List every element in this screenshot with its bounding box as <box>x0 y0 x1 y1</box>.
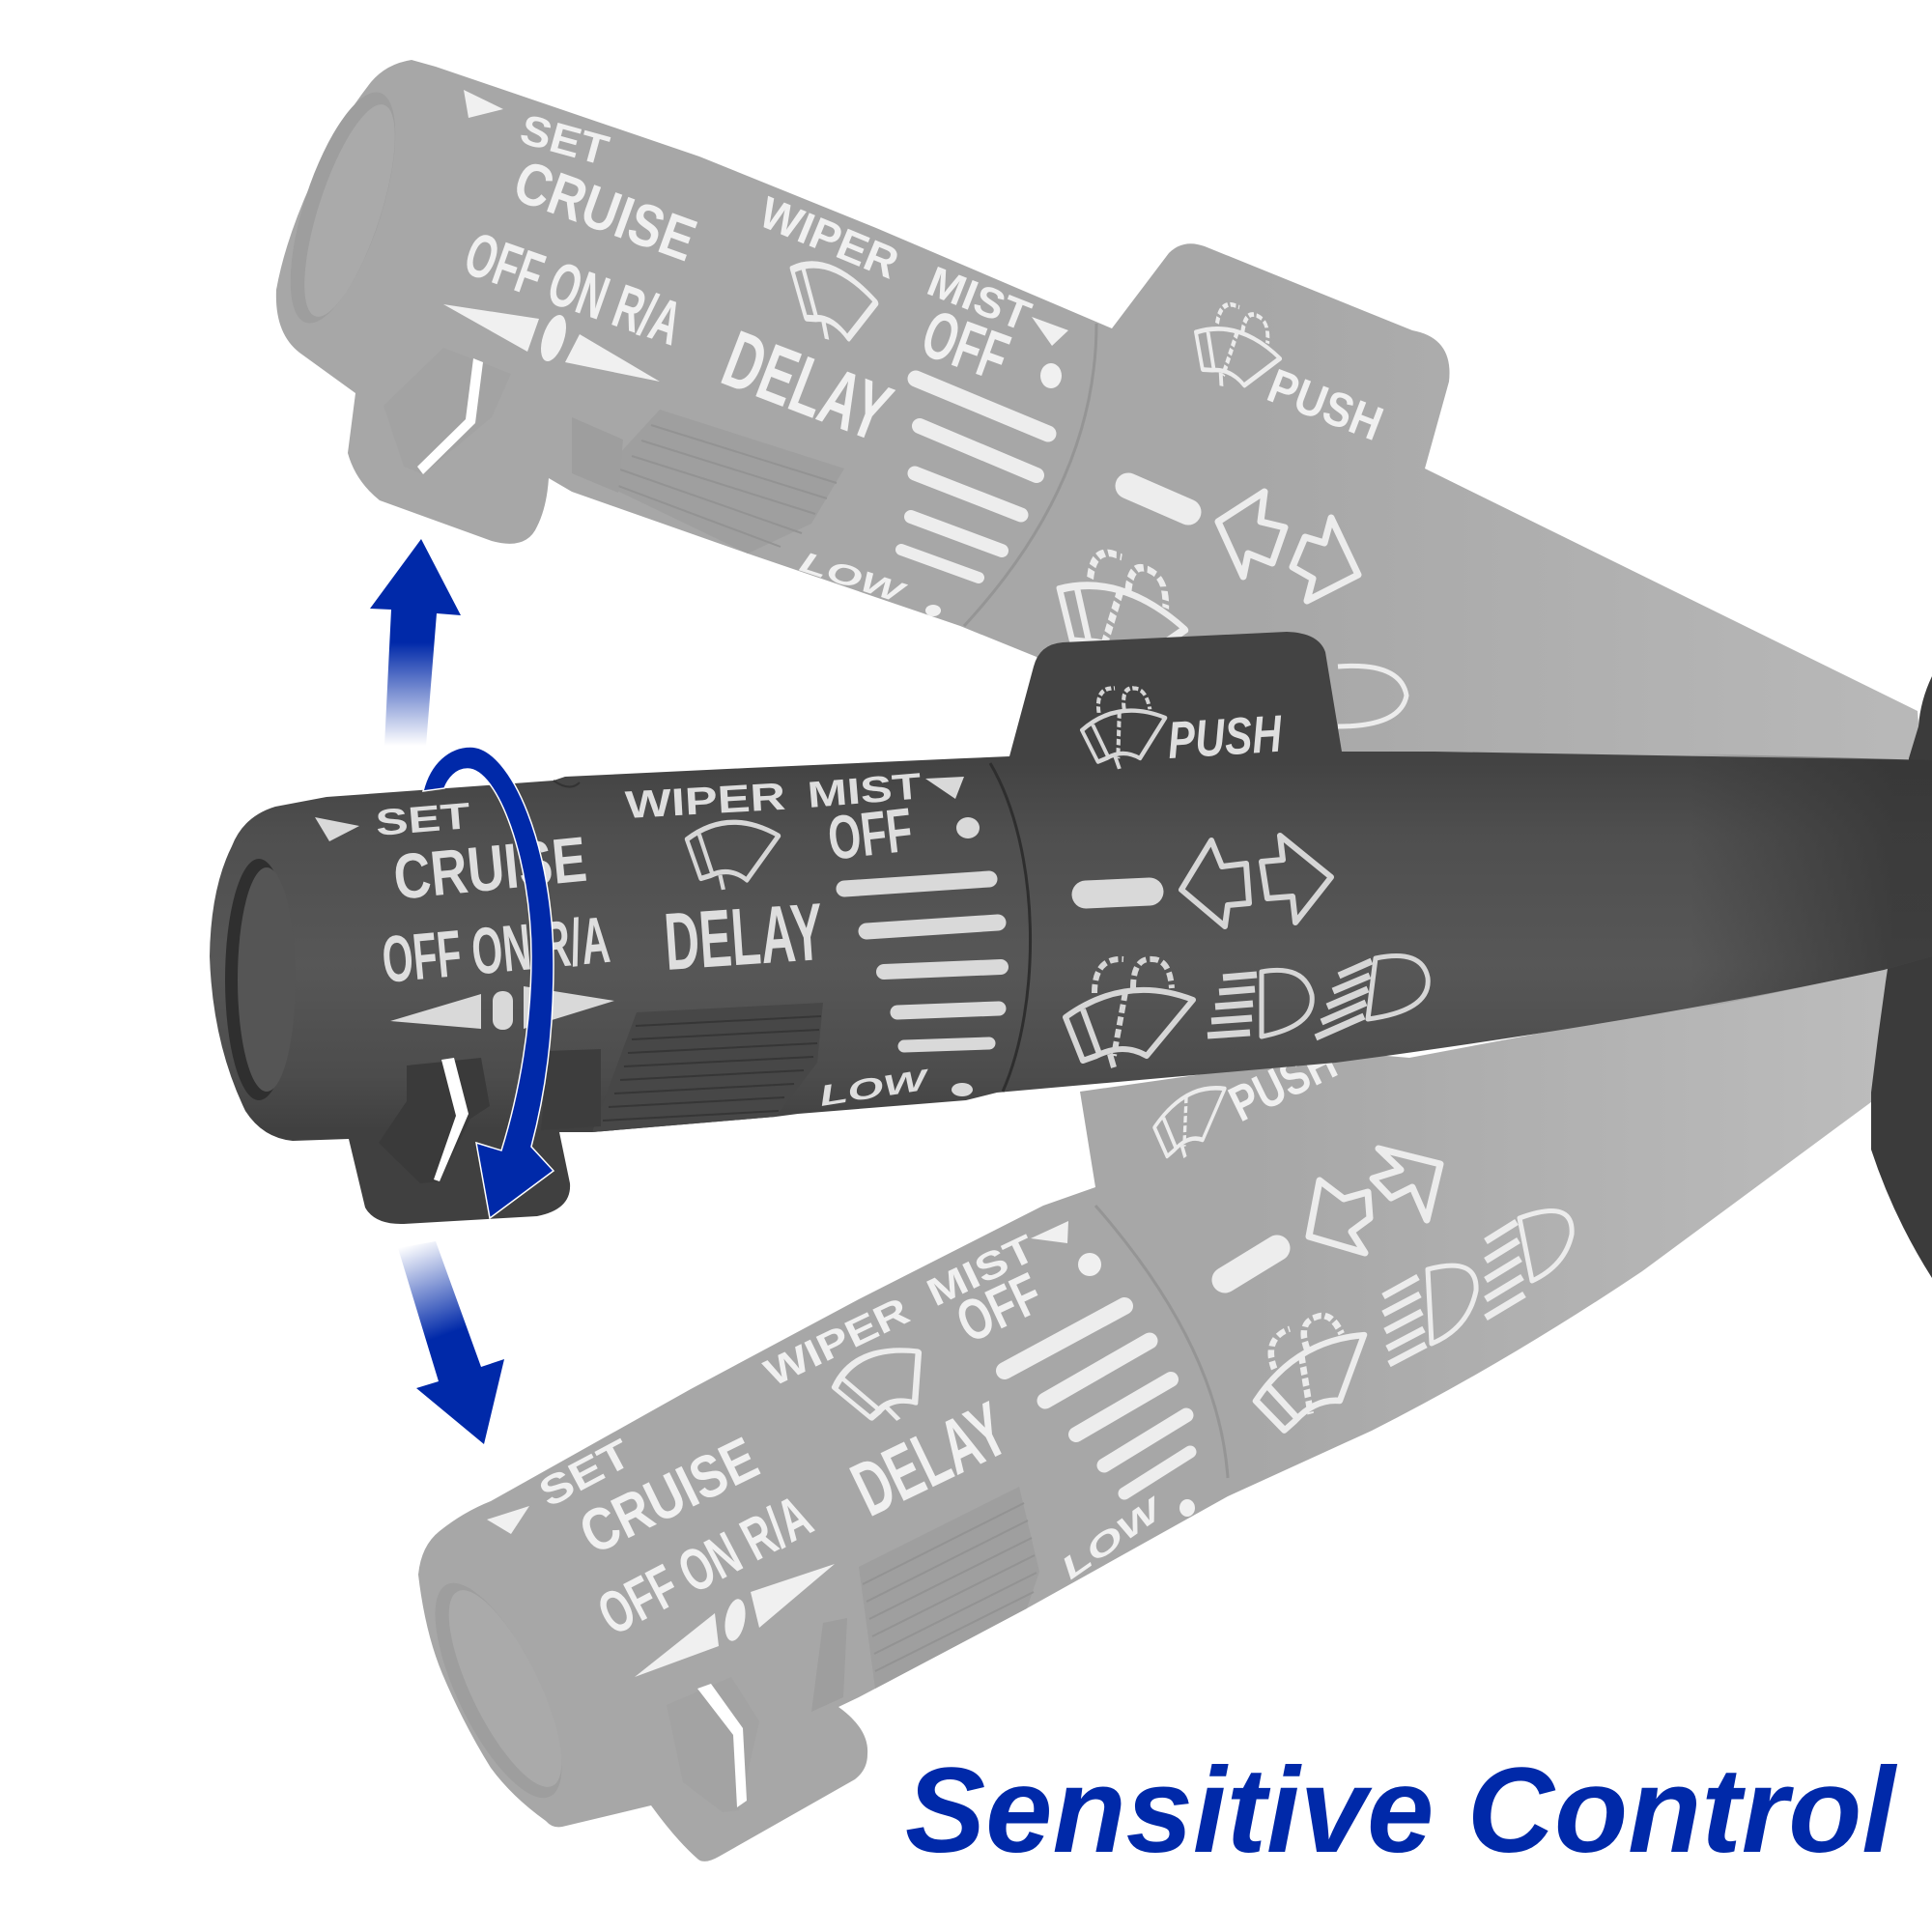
label LOW: LOW <box>817 1064 933 1113</box>
label SET: SET <box>374 796 471 844</box>
dot <box>956 817 980 838</box>
ghost label SET: SET <box>531 1430 639 1516</box>
ghost speed bars <box>1005 1306 1190 1493</box>
ghost label WIPER: WIPER <box>758 1290 916 1395</box>
arrow: rotation <box>423 747 554 1218</box>
ghost switch stripe <box>697 1684 747 1807</box>
ghost left arrow <box>1309 1180 1370 1253</box>
ghost collar ring line <box>1095 1206 1228 1478</box>
ghost lever: raised position <box>269 60 1922 773</box>
ghost lever: lowered position <box>411 966 1898 1861</box>
low dot <box>952 1083 973 1096</box>
ghost label CRUISE: CRUISE <box>570 1425 768 1568</box>
low beam icon <box>1208 970 1312 1037</box>
title: Sensitive Control <box>905 1744 1897 1878</box>
ghost label OFF: OFF <box>913 296 1018 395</box>
label MIST: MIST <box>806 766 923 816</box>
ghost switch <box>667 1677 759 1812</box>
wiper icon <box>686 816 781 896</box>
cruise arrows <box>390 986 614 1030</box>
ghost label LOW: LOW <box>1054 1490 1171 1586</box>
ghost knurled dial <box>595 410 844 554</box>
ghost left arrow <box>1218 492 1285 577</box>
ghost triangle marker right <box>1031 1221 1068 1243</box>
ghost right arrow <box>1373 1149 1440 1220</box>
ghost pad wash icon <box>1152 1081 1230 1167</box>
ghost label OFF ON R/A: OFF ON R/A <box>588 1483 822 1648</box>
ghost label PUSH: PUSH <box>1261 358 1390 451</box>
ghost end cap lens <box>411 1567 586 1814</box>
ghost triangle marker <box>464 90 503 118</box>
collar ring line <box>990 763 1031 1092</box>
steering column mount <box>1871 676 1932 1278</box>
triangle marker right <box>925 777 964 799</box>
left arrow <box>1181 840 1249 926</box>
ghost speed bars <box>901 379 1048 578</box>
arrow: up <box>370 539 461 746</box>
ghost label MIST: MIST <box>921 1227 1041 1315</box>
shaft wash icon <box>1065 959 1193 1067</box>
ghost dot <box>1078 1253 1101 1276</box>
high beam icon <box>1316 956 1428 1037</box>
right arrow <box>1262 836 1331 923</box>
ghost low beam icon <box>1383 1265 1476 1364</box>
ghost label PUSH: PUSH <box>1221 1034 1346 1133</box>
ghost dash bar <box>1225 1248 1277 1280</box>
main lever <box>210 632 1932 1278</box>
ghost knurled dial <box>859 1487 1039 1689</box>
label DELAY: DELAY <box>662 886 826 987</box>
ghost label LOW: LOW <box>796 546 911 611</box>
ghost switch <box>384 348 511 474</box>
ghost label MIST: MIST <box>921 258 1037 341</box>
ghost cruise arrows <box>635 1564 835 1677</box>
ghost headlamp icon <box>1338 666 1406 726</box>
label OFF ON R/A: OFF ON R/A <box>379 903 612 997</box>
ghost triangle marker <box>487 1506 529 1534</box>
arrow: down <box>398 1241 504 1444</box>
ghost dot <box>1040 363 1062 388</box>
end cap lens <box>225 859 293 1100</box>
ghost low dot <box>925 605 941 616</box>
ghost label DELAY: DELAY <box>839 1385 1020 1532</box>
label PUSH: PUSH <box>1166 705 1284 770</box>
ghost high beam icon <box>1486 1211 1572 1318</box>
ghost collar ring line <box>964 324 1096 626</box>
ghost low dot <box>1179 1499 1195 1517</box>
ghost dash bar <box>1128 486 1188 512</box>
ghost wiper icon <box>820 1344 956 1429</box>
ghost switch slot <box>572 417 623 493</box>
speed bars <box>844 879 1001 1046</box>
ghost switch slot <box>811 1618 847 1712</box>
ghost cruise arrows <box>443 304 660 382</box>
lever body <box>210 632 1932 1224</box>
ghost end cap lens <box>269 81 417 334</box>
ghost label CRUISE: CRUISE <box>505 148 704 274</box>
pad wash icon <box>1076 688 1173 769</box>
ghost lever body <box>276 60 1922 773</box>
ghost label WIPER: WIPER <box>753 186 906 288</box>
ghost triangle marker right <box>1032 317 1068 346</box>
ghost label OFF: OFF <box>947 1261 1051 1355</box>
knurled dial <box>592 1003 823 1132</box>
ghost shaft wash icon <box>1238 1301 1382 1437</box>
ghost label OFF ON R/A: OFF ON R/A <box>456 218 691 358</box>
ghost lever body <box>418 966 1898 1861</box>
ghost right arrow <box>1293 518 1358 601</box>
ghost shaft wash icon <box>1055 531 1189 690</box>
ghost label DELAY: DELAY <box>712 313 903 459</box>
label WIPER: WIPER <box>624 776 786 827</box>
ghost pad wash icon <box>1190 290 1284 411</box>
ghost label SET: SET <box>515 105 613 175</box>
label OFF: OFF <box>824 795 916 873</box>
switch stripe <box>434 1058 469 1181</box>
ghost wiper icon <box>791 243 880 370</box>
switch <box>379 1058 490 1183</box>
collar step <box>554 781 580 787</box>
triangle marker <box>315 817 359 841</box>
shaft shading near mount <box>1690 753 1932 1010</box>
switch slot <box>541 1049 601 1130</box>
ghost switch stripe <box>417 358 483 474</box>
label CRUISE: CRUISE <box>390 823 589 913</box>
dash bar <box>1086 892 1150 895</box>
